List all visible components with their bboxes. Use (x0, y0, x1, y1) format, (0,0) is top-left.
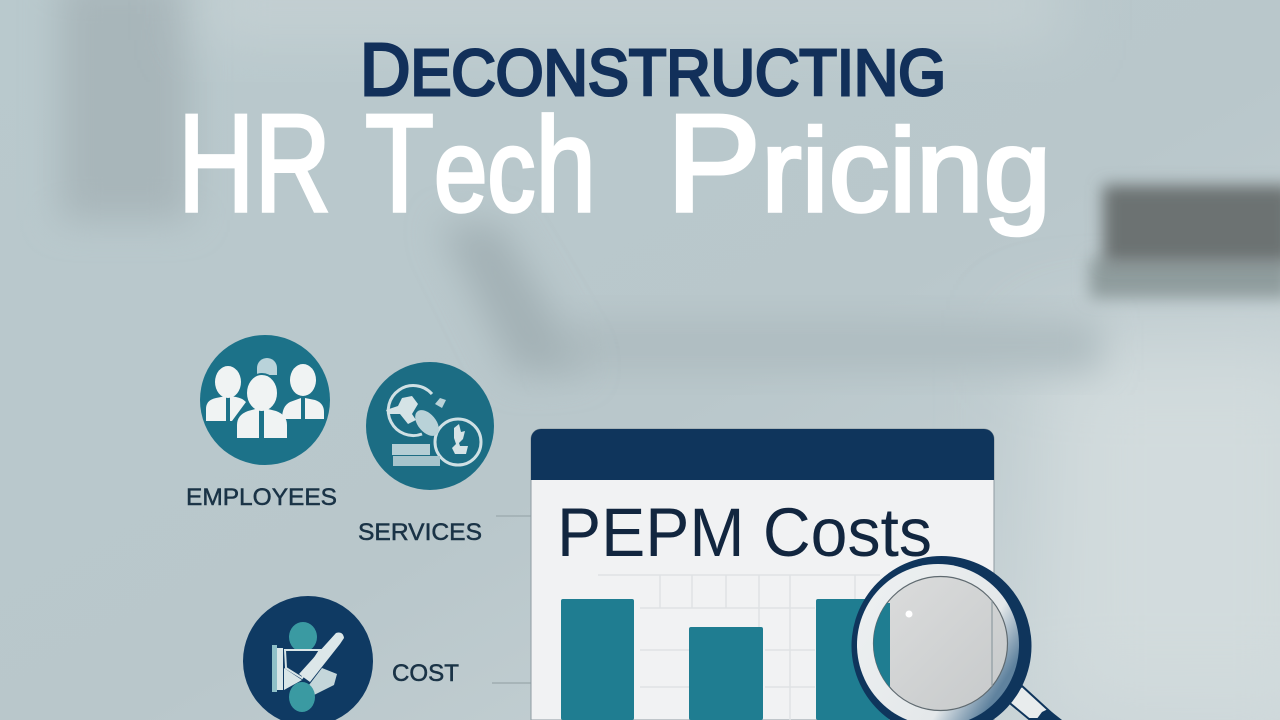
icon: employees (200, 335, 330, 465)
title: HR Tech Pricing: Pricing (666, 86, 1051, 241)
magnifier handle (1006, 686, 1062, 720)
title: HR Tech Pricing: Tech (365, 86, 596, 241)
title: HR Tech Pricing (178, 86, 1051, 241)
icon: services (366, 362, 494, 490)
title: HR Tech Pricing: HR (178, 86, 331, 241)
bar chart (561, 599, 890, 720)
label: services: SERVICES (358, 519, 482, 546)
panel heading: PEPM Costs (557, 494, 932, 571)
panel: PEPM costs (531, 429, 994, 720)
panel header bar (531, 429, 994, 480)
label: employees: EMPLOYEES (186, 484, 337, 511)
title: Deconstructing: DECONSTRUCTING (360, 28, 946, 111)
icon: magnifying glass (852, 556, 1062, 720)
icon: cost (243, 596, 373, 720)
connector: cost to panel (492, 682, 531, 684)
connector: services to panel (496, 515, 531, 517)
label: cost: COST (392, 660, 459, 687)
